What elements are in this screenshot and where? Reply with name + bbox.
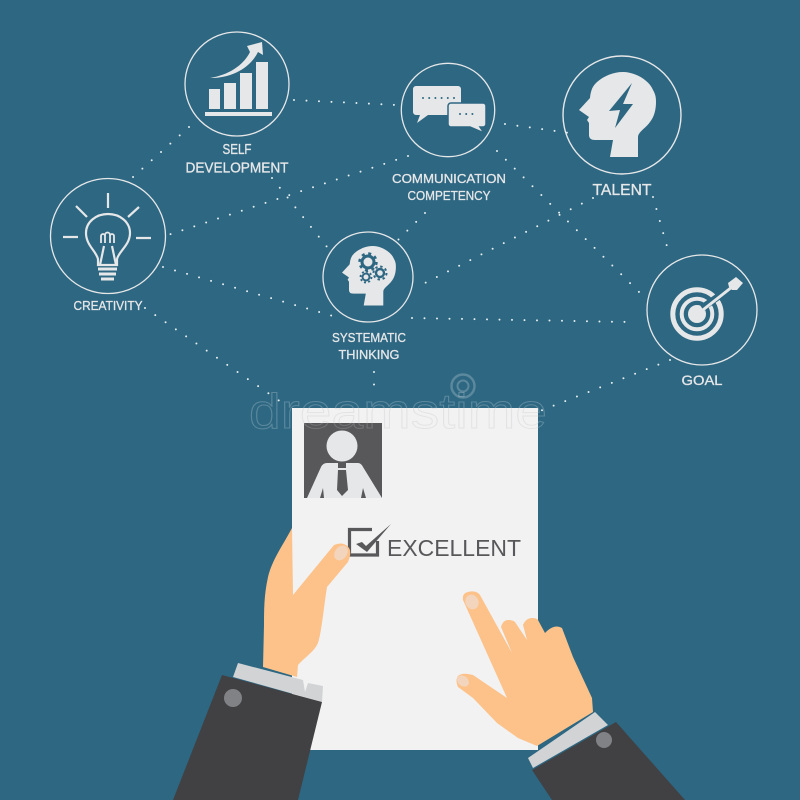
label: self development: SELF [222,142,252,158]
icon: light bulb [63,193,151,279]
label: communication competency: COMMUNICATION [392,171,506,186]
node: goal [647,255,757,388]
icon: growth bar chart [205,42,272,116]
label: systematic thinking: THINKING [338,348,400,362]
label: self development [186,142,289,176]
label: self development: DEVELOPMENT [186,160,289,176]
label: creativity: CREATIVITY [74,299,143,313]
icon: speech bubbles [413,86,486,133]
left shirt cuff [233,663,323,702]
icon: head with gears [342,246,396,306]
rating text: excellent: EXCELLENT [387,535,521,561]
node: creativity [50,178,166,313]
icon: target with arrow [673,277,743,338]
right hand [455,591,593,746]
node: communication competency [392,63,506,203]
checkbox with tick [350,524,391,555]
left arm holding paper [173,528,351,800]
label: communication competency [392,171,506,203]
right arm pointing [455,591,685,800]
paper: resume [292,408,538,750]
watermark: dreamstime [250,373,545,430]
label: systematic thinking: SYSTEMATIC [332,331,406,345]
resume photo [304,423,382,498]
icon: head with lightning bolt [579,72,656,157]
right sleeve [532,722,685,800]
watermark: dreamstime: dreamstime [249,385,547,439]
left hand [263,528,351,677]
label: communication competency: COMPETENCY [408,188,491,203]
dotted connection network [133,100,670,411]
node: systematic thinking [323,232,413,362]
right shirt cuff [528,712,608,768]
right sleeve button [596,732,612,748]
node: self development [185,32,289,176]
node: talent [563,56,681,199]
label: talent: TALENT [592,182,652,199]
left sleeve button [224,689,242,707]
watermark: dreamstime: dreamstime [249,385,547,439]
label: goal: GOAL [682,372,723,388]
label: systematic thinking [332,331,406,362]
left sleeve [173,675,322,800]
